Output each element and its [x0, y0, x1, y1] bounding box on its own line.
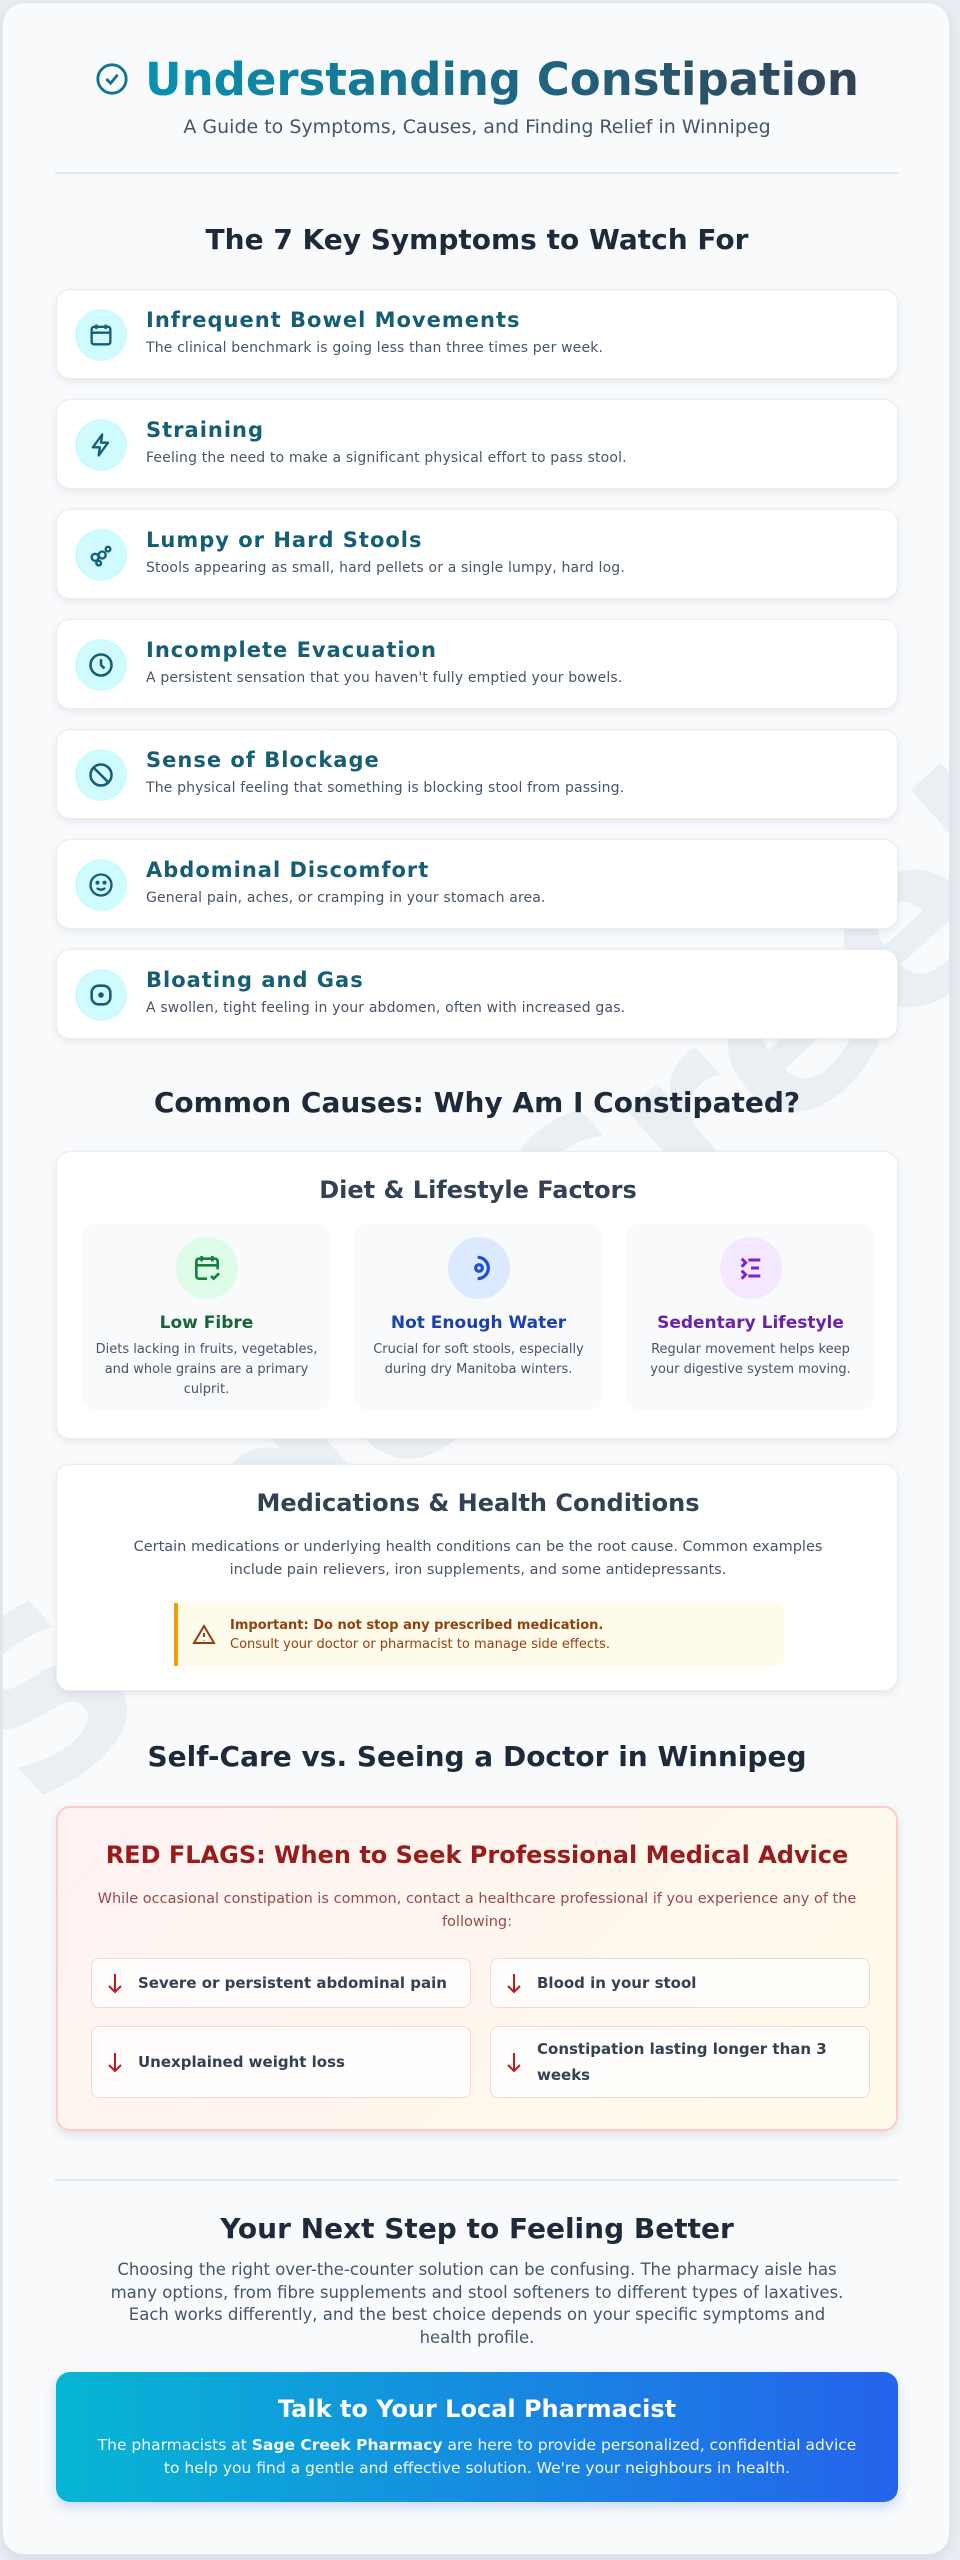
factor: water: during dry Manitoba winters.	[385, 1362, 572, 1377]
callout: warning	[174, 1603, 784, 1666]
factor: low fibre	[83, 1224, 330, 1410]
subtitle: A Guide to Symptoms, Causes, and Finding Relief in Winnipeg	[183, 116, 771, 138]
symptom card 6: General pain, aches, or cramping in your stomach area.	[146, 890, 546, 906]
symptom card 5: The physical feeling that something is blocking stool from passing.	[146, 780, 624, 796]
header title: Understanding Constipation	[145, 52, 859, 106]
factor: sedentary	[627, 1224, 874, 1410]
icon: calendar check	[176, 1237, 238, 1299]
icon: warning	[192, 1624, 216, 1644]
symptom card 3: Lumpy or Hard Stools	[146, 528, 423, 552]
CTA title: Talk to Your Local Pharmacist	[278, 2395, 676, 2423]
factor: water	[355, 1224, 602, 1410]
red flags title: RED FLAGS: When to Seek Professional Medical Advice	[106, 1841, 848, 1869]
panel title: Diet & Lifestyle Factors	[319, 1176, 637, 1204]
heading: self-care: Self-Care vs. Seeing a Doctor in Winnipeg	[147, 1740, 807, 1773]
symptom card 2: Straining	[146, 418, 264, 442]
item 3	[91, 2026, 471, 2098]
factor: sedentary: your digestive system moving.	[650, 1362, 851, 1377]
icon: bolt	[75, 419, 127, 471]
item 1	[91, 1958, 471, 2008]
factor: low fibre: Low Fibre	[160, 1313, 253, 1333]
panel title: Medications & Health Conditions	[256, 1489, 700, 1517]
factor: low fibre: and whole grains are a primary	[105, 1362, 308, 1377]
CTA text: The pharmacists at Sage Creek Pharmacy are here to provide personalized, confidential advice to help you find a gentle and effective solution. We're your neighbours in health.	[98, 2436, 856, 2477]
factor: water: Not Enough Water	[391, 1313, 566, 1333]
heading: symptoms: The 7 Key Symptoms to Watch For	[206, 223, 748, 256]
icon: water	[448, 1237, 510, 1299]
callout: warning: Important: Do not stop any prescribed medication.	[230, 1618, 603, 1633]
factor: low fibre: Diets lacking in fruits, vegetables,	[96, 1342, 317, 1357]
item 2	[490, 1958, 870, 2008]
symptom card 6	[56, 839, 898, 929]
symptom card 5: Sense of Blockage	[146, 748, 380, 772]
panel: red flags	[56, 1806, 898, 2131]
icon: blocked	[75, 749, 127, 801]
item 1: Severe or persistent abdominal pain	[138, 1974, 447, 1992]
symptom card 6: Abdominal Discomfort	[146, 858, 429, 882]
symptom card 7: A swollen, tight feeling in your abdomen, often with increased gas.	[146, 1000, 625, 1016]
icon: list	[720, 1237, 782, 1299]
symptom card 7	[56, 949, 898, 1039]
callout: warning: Consult your doctor or pharmacist to manage side effects.	[230, 1637, 610, 1652]
factor: sedentary: Regular movement helps keep	[651, 1342, 850, 1357]
symptom card 1	[56, 289, 898, 379]
heading: causes: Common Causes: Why Am I Constipated?	[154, 1086, 800, 1119]
symptom card 4: A persistent sensation that you haven't fully emptied your bowels.	[146, 670, 622, 686]
symptom card 3	[56, 509, 898, 599]
icon: pellets	[75, 529, 127, 581]
icon: bloating	[75, 969, 127, 1021]
factor: water: Crucial for soft stools, especially	[373, 1342, 584, 1357]
symptom card 1: Infrequent Bowel Movements	[146, 308, 520, 332]
item 4: Constipation lasting longer than 3 weeks	[537, 2040, 827, 2084]
symptom card 4	[56, 619, 898, 709]
text: next step: Choosing the right over-the-counter solution can be confusing. The pharmacy aisle has many options, from fibre supplements and stool softeners to different types of laxatives. Each works differently, and the best choice depends on your specific symptoms and health profile.	[111, 2260, 843, 2346]
symptom card 1: The clinical benchmark is going less than three times per week.	[146, 340, 603, 356]
symptom card 4: Incomplete Evacuation	[146, 638, 437, 662]
item 4	[490, 2026, 870, 2098]
symptom card 3: Stools appearing as small, hard pellets or a single lumpy, hard log.	[146, 560, 625, 576]
item 3: Unexplained weight loss	[138, 2053, 345, 2071]
panel: medications	[56, 1464, 898, 1691]
symptom card 2: Feeling the need to make a significant physical effort to pass stool.	[146, 450, 627, 466]
red flags intro: While occasional constipation is common, contact a healthcare professional if you experience any of the following:	[98, 1891, 856, 1930]
factor: sedentary: Sedentary Lifestyle	[657, 1313, 844, 1333]
panel: diet & lifestyle	[56, 1151, 898, 1439]
item 2: Blood in your stool	[537, 1974, 696, 1992]
icon: clock	[75, 639, 127, 691]
symptom card 7: Bloating and Gas	[146, 968, 364, 992]
icon: check circle	[96, 63, 128, 95]
symptom card 5	[56, 729, 898, 819]
icon: face	[75, 859, 127, 911]
symptom card 2	[56, 399, 898, 489]
icon: calendar	[75, 309, 127, 361]
factor: low fibre: culprit.	[184, 1382, 229, 1397]
text: Certain medications or underlying health conditions can be the root cause. Common examples include pain relievers, iron supplements, and some antidepressants.	[134, 1539, 822, 1578]
heading: next step: Your Next Step to Feeling Better	[220, 2212, 734, 2245]
callout: pharmacist CTA	[56, 2372, 898, 2502]
